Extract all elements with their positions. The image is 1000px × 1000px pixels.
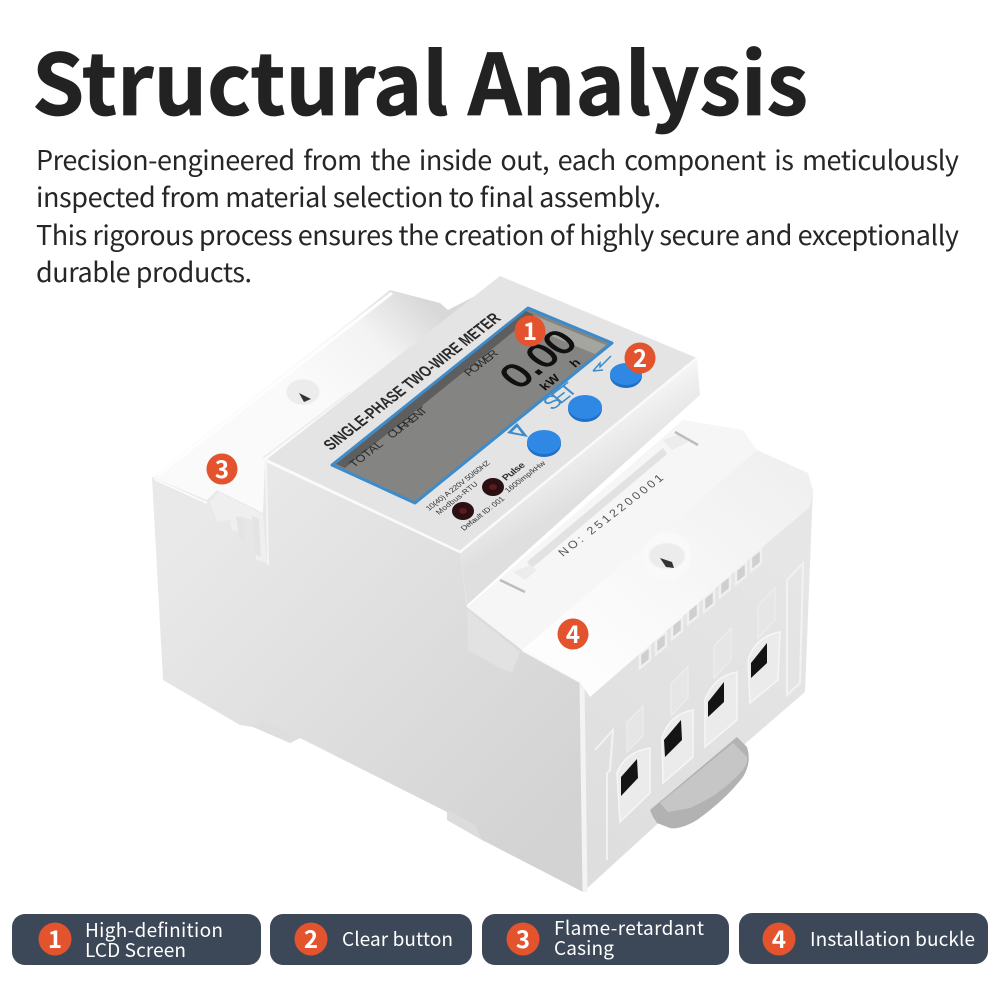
legend item 3: Flame-retardant [554,914,704,941]
meter: lower module top surface [522,450,813,697]
legend item 3 [482,914,729,965]
LCD screen: POWER [462,348,501,379]
legend item 3: Casing [554,934,614,961]
legend item 4 [739,913,988,964]
pulse LEDs [452,478,504,520]
badge 4: 4 [566,615,580,650]
energy meter device [152,276,813,892]
intro text block [36,139,959,290]
legend item 2 [270,914,472,965]
rear screw [286,379,320,405]
legend item 2: 2 [304,920,318,955]
badge 2: 2 [633,339,647,374]
badge 3 [206,450,238,485]
LCD screen [332,308,612,503]
wire clamp vents [640,549,761,668]
meter: large front face [152,460,583,892]
LCD screen: kW [537,372,563,393]
LCD screen: 0.00 [491,323,586,395]
serial number: NO: 2512200001 [556,471,668,559]
rating text: Pulse [500,460,528,483]
LCD screen: CURRENT [385,405,431,441]
rating text [424,459,548,532]
rating text: 10(40) A 220V 50/60HZ [424,459,492,512]
badge 2 [624,339,656,374]
meter: front faceplate [266,276,697,552]
legend item 2: Clear button [342,925,453,952]
meter: right end face with terminals [580,488,813,892]
LCD screen: TOTAL [347,438,387,470]
badge 3: 3 [215,450,229,485]
legend item 1: 1 [48,920,62,955]
intro text block: This rigorous process ensures the creation of highly secure and exceptionally [36,214,959,253]
button labels: SET [538,378,583,414]
terminal holes [621,643,767,796]
legend item 1: LCD Screen [85,936,186,963]
legend item 1: High-definition [85,916,223,943]
right clip recess [467,610,520,672]
din rail clip [650,737,749,828]
badge 1 [514,312,546,347]
legend item 4: Installation buckle [810,925,975,952]
terminal recesses [617,632,780,822]
model name: SINGLE-PHASE TWO-WIRE METER [319,309,505,453]
blue buttons [527,363,642,457]
title: Structural Analysis [32,17,808,139]
meter: rear top block [152,290,500,530]
rating text: 1600imp/kHw [503,459,548,494]
rating text: Default ID: 001 [459,495,507,532]
badge 4 [558,615,588,650]
side channels [595,563,803,860]
legend item 4: 4 [772,920,786,955]
intro text block: inspected from material selection to final assembly. [36,176,661,215]
legend item 1 [12,914,261,965]
meter: terminal rail step [467,420,757,650]
engraved terminal numbers [627,588,775,752]
LCD screen: h [567,356,584,370]
left clip recess [210,492,267,563]
intro text block: Precision-engineered from the inside out, each component is meticulously [36,139,959,178]
meter: faceplate right wall [460,358,700,605]
button labels [507,356,611,437]
lower screw [643,532,691,580]
intro text block: durable products. [36,251,252,290]
badge 1: 1 [523,312,537,347]
legend item 3: 3 [516,920,530,955]
rating text: Modbus-RTU [434,480,480,516]
